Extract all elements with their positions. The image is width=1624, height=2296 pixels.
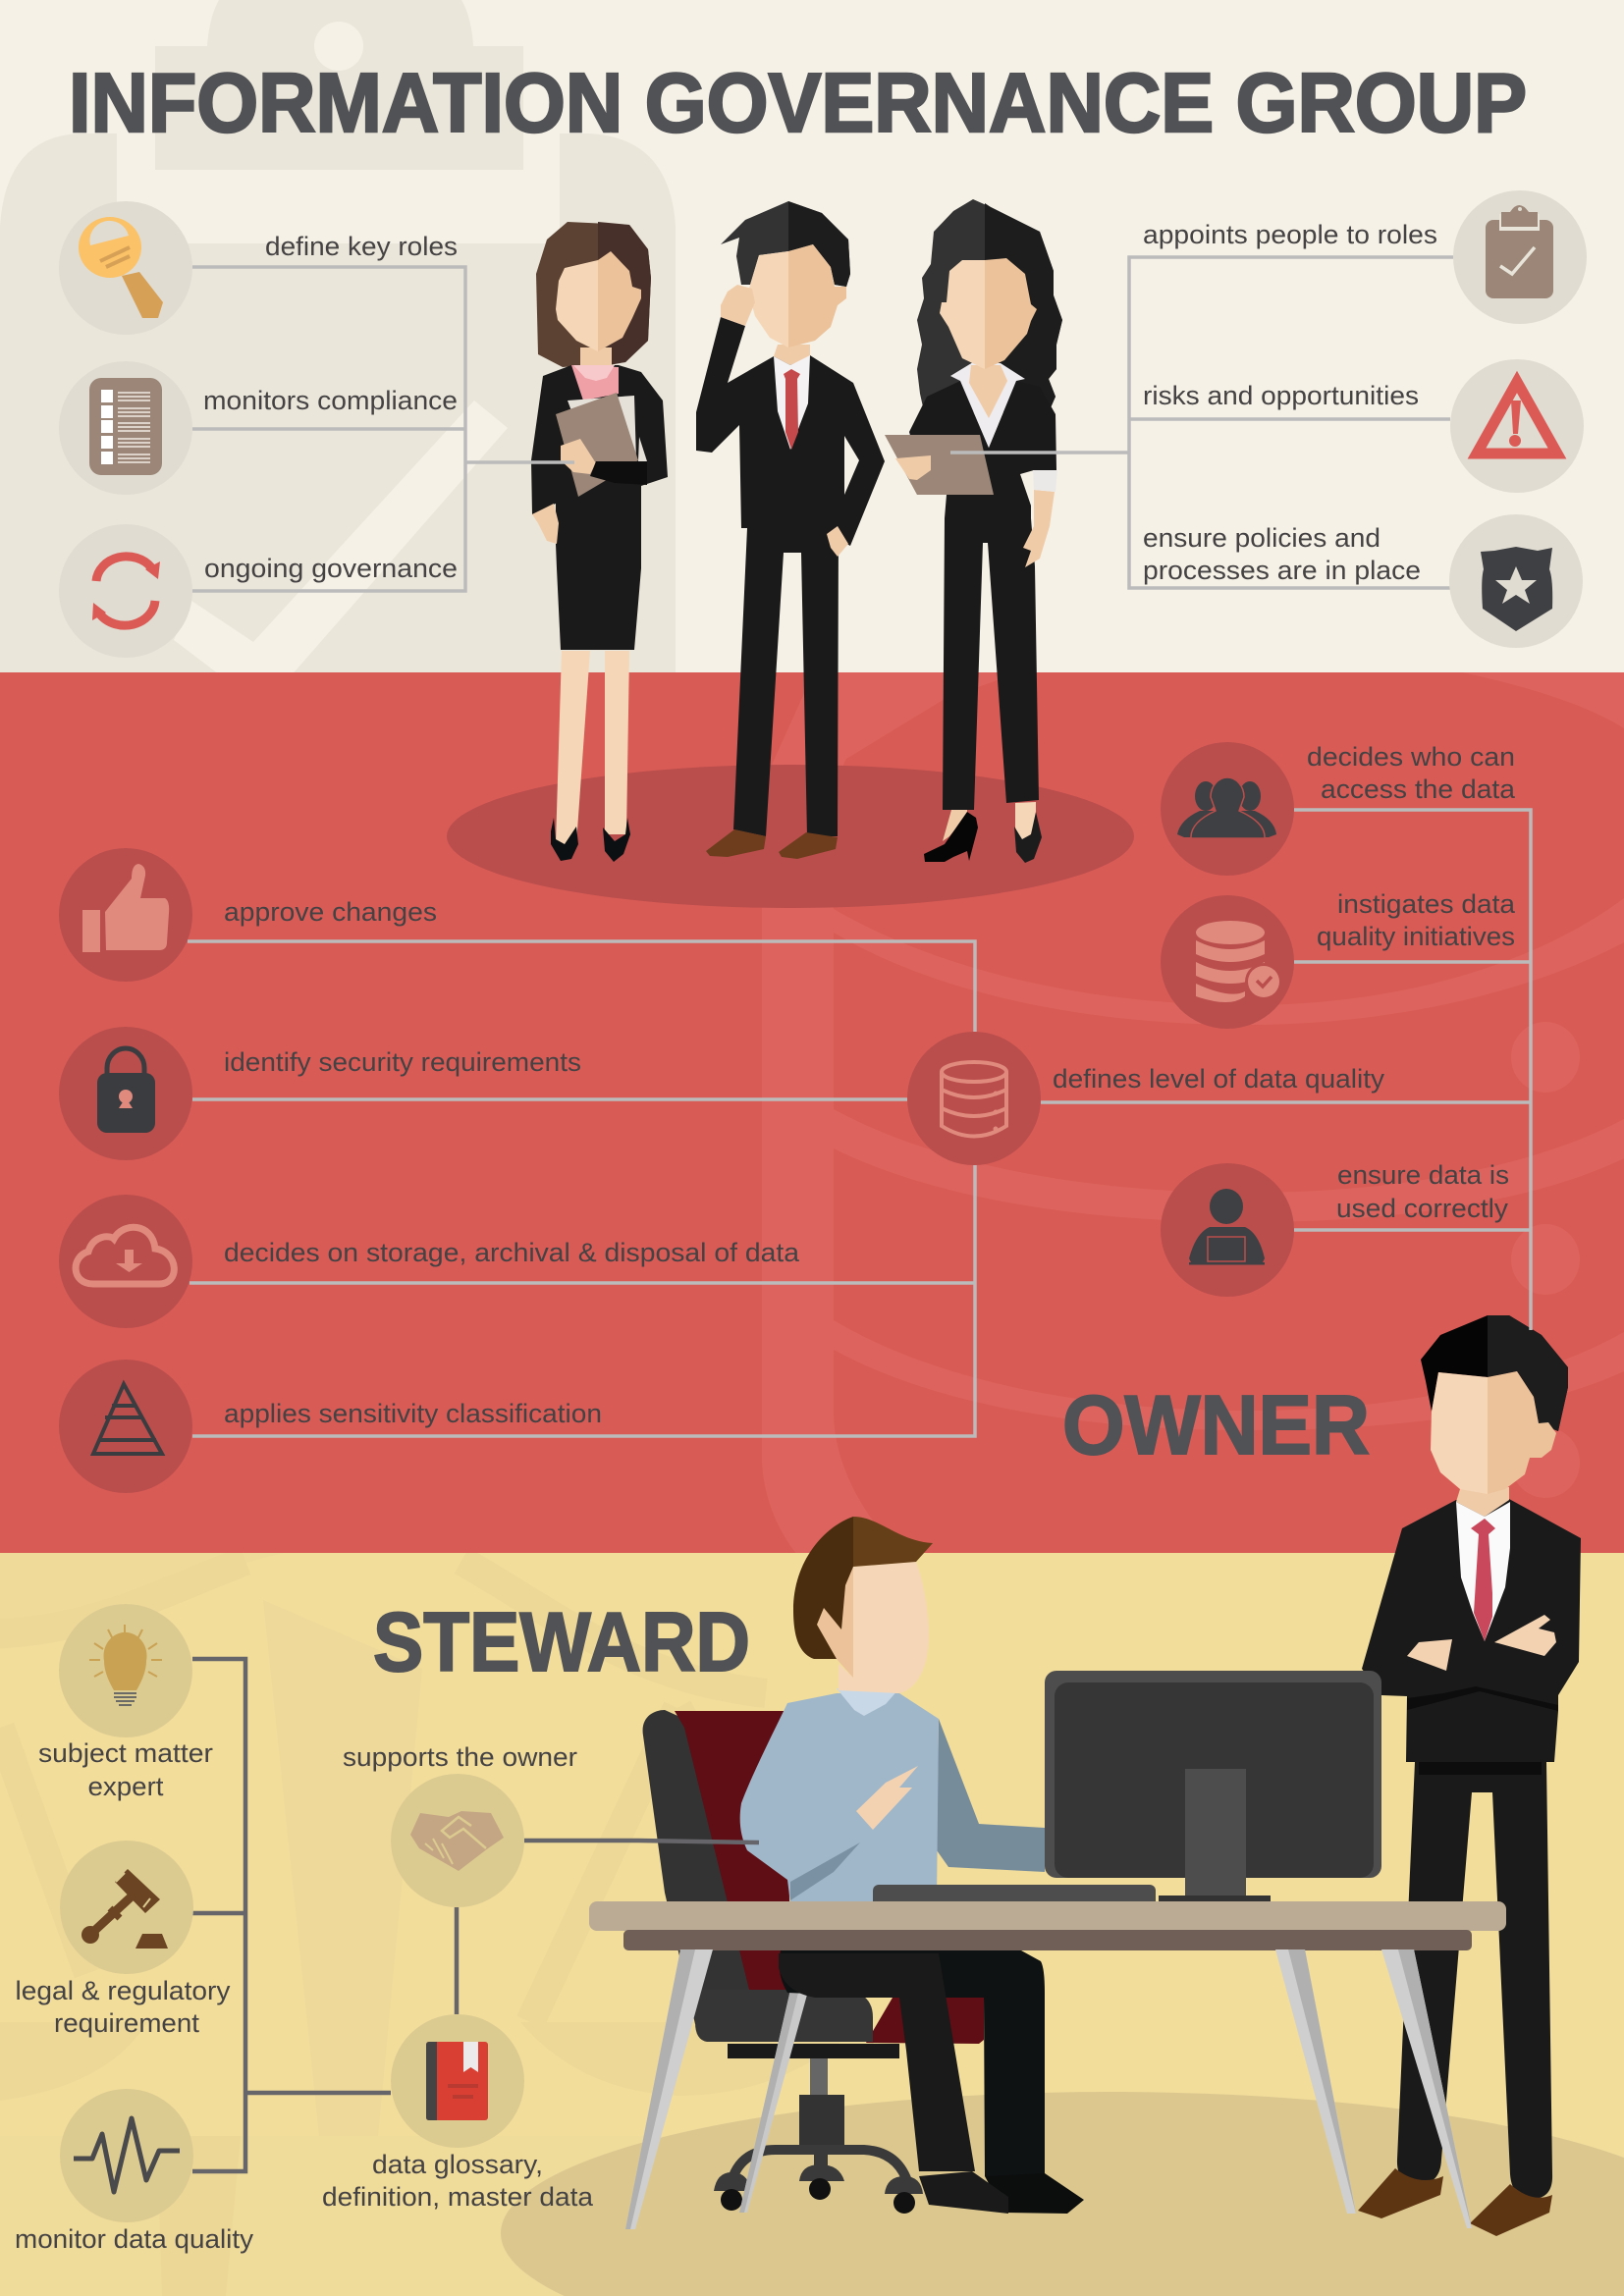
label: approve changes: approve changes <box>224 897 437 927</box>
label: decides who can access the data: access the data <box>1321 774 1516 804</box>
icon: checklist document <box>59 361 192 495</box>
label: identify security requirements: identify security requirements <box>224 1047 581 1077</box>
icon: cloud download <box>59 1195 192 1328</box>
icon: police badge <box>1449 514 1583 648</box>
panel: cream background with clipboard watermark <box>0 0 676 672</box>
panel: owner right connectors and items <box>1041 742 1531 1330</box>
label: instigates data quality initiatives: quality initiatives <box>1317 922 1515 951</box>
label: applies sensitivity classification: applies sensitivity classification <box>224 1399 602 1428</box>
label: ensure policies and processes <box>1143 523 1421 585</box>
label: data glossary, definition, master data: definition, master data <box>322 2182 594 2212</box>
icon: handshake <box>391 1774 524 1907</box>
label: legal and regulatory requirement <box>16 1976 231 2038</box>
illustration: desk <box>589 1901 1506 2229</box>
icon: gavel <box>60 1841 193 1974</box>
panel: yellow background with scales watermark <box>0 1553 1624 2296</box>
label: define key roles: define key roles <box>265 232 458 261</box>
icon: light bulb <box>59 1604 192 1737</box>
label: ensure data is used correctly: used correctly <box>1336 1194 1509 1223</box>
label: instigates data quality initiatives <box>1317 889 1516 951</box>
illustration: businesswoman with clipboard <box>885 199 1062 863</box>
label: monitors compliance: monitors compliance <box>203 386 458 415</box>
icon: refresh arrows <box>59 524 192 658</box>
label: ongoing governance: ongoing governance <box>204 554 458 583</box>
label: subject matter expert: expert <box>88 1772 164 1801</box>
panel: governance group left connectors and items <box>59 201 574 658</box>
label: defines level of data quality: defines level of data quality <box>1053 1064 1385 1094</box>
label: supports the owner: supports the owner <box>343 1742 577 1772</box>
panel: owner left connectors and items <box>59 848 1041 1493</box>
icon: database hub <box>907 1032 1041 1165</box>
illustration: office chair <box>643 1710 984 2214</box>
label: legal and regulatory requirement: legal & regulatory <box>16 1976 231 2005</box>
label: data glossary, definition, master data: data glossary, <box>372 2150 543 2179</box>
illustration: owner standing with crossed arms <box>1358 1315 1581 2236</box>
label: ensure policies and processes: ensure policies and <box>1143 523 1380 553</box>
label: ensure policies and processes: processes are in place <box>1143 556 1421 585</box>
illustration: businesswoman with folder <box>531 222 668 862</box>
heading: STEWARD: STEWARD <box>373 1596 750 1689</box>
panel: governance group right connectors and items <box>950 190 1587 648</box>
label: decides who can access the data: decides who can <box>1307 742 1515 772</box>
label: ensure data is used correctly <box>1336 1160 1509 1223</box>
icon: thumbs up <box>59 848 192 982</box>
illustration: computer monitor and keyboard <box>873 1671 1381 1908</box>
illustration: seated steward <box>740 1517 1084 2214</box>
icon: group of people <box>1161 742 1294 876</box>
icon: book <box>391 2014 524 2148</box>
icon: pyramid <box>59 1360 192 1493</box>
icon: user at laptop <box>1161 1163 1294 1297</box>
illustration: businessman on the phone <box>696 201 885 859</box>
label: appoints people to roles: appoints people to roles <box>1143 220 1437 249</box>
label: instigates data quality initiatives: instigates data <box>1337 889 1516 919</box>
panel: steward connectors and items <box>15 1604 759 2254</box>
illustration: front desk leg behind seated man <box>739 1990 807 2213</box>
label: decides who can access the data <box>1307 742 1516 804</box>
icon: clipboard <box>1453 190 1587 324</box>
label: legal and regulatory requirement: requirement <box>54 2008 200 2038</box>
label: risks and opportunities: risks and opportunities <box>1143 381 1419 410</box>
label: monitor data quality: monitor data quality <box>15 2224 254 2254</box>
icon: padlock <box>59 1027 192 1160</box>
icon: key <box>59 201 192 335</box>
heading: OWNER: OWNER <box>1062 1379 1370 1472</box>
label: ensure data is used correctly: ensure data is <box>1337 1160 1509 1190</box>
icon: warning triangle <box>1450 359 1584 493</box>
panel: red background with database watermark <box>0 672 1624 1561</box>
label: subject matter expert: subject matter <box>38 1738 213 1768</box>
label: subject matter expert <box>38 1738 213 1801</box>
icon: pulse line <box>60 2089 193 2222</box>
label: data glossary, definition, master data <box>322 2150 594 2212</box>
title: INFORMATION GOVERNANCE GROUP <box>69 57 1527 150</box>
label: decides on storage, archival and disposal: decides on storage, archival & disposal of data <box>224 1238 800 1267</box>
icon: database with check <box>1161 895 1294 1029</box>
